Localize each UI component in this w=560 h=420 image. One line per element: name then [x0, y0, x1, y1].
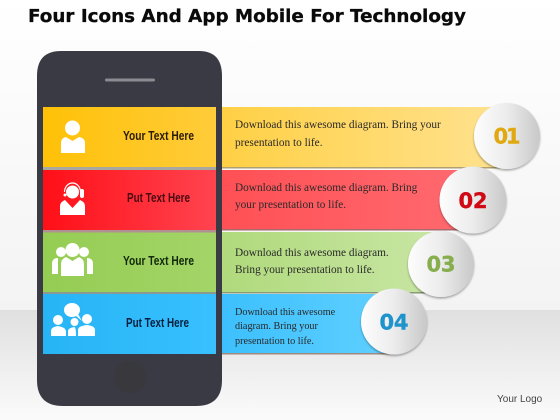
icon: group	[52, 243, 93, 276]
ribbon 2 text: Download this awesome diagram. Bring	[235, 182, 418, 194]
phone speaker	[105, 78, 155, 82]
ribbon 4 text: diagram. Bring your	[235, 321, 319, 332]
home button	[114, 361, 146, 393]
card 4 label: Put Text Here	[126, 316, 189, 330]
icon: group with speech bubble	[51, 303, 95, 336]
badge 04: 04	[380, 310, 408, 334]
ribbon 4: blue	[222, 294, 394, 354]
ribbon 1 text: Download this awesome diagram. Bring your	[235, 119, 441, 131]
card 3 label: Your Text Here	[123, 254, 194, 268]
floor band	[0, 310, 560, 420]
phone body	[37, 51, 222, 406]
card 3: green	[43, 232, 216, 294]
card 4: blue	[43, 294, 216, 354]
icon: headset agent	[60, 183, 85, 215]
ribbon 4 text: presentation to life.	[235, 336, 314, 347]
background	[0, 0, 560, 310]
card 1: yellow	[43, 107, 216, 170]
ribbon 3: green	[222, 232, 440, 294]
ribbon 2 text: your presentation to life.	[235, 199, 346, 211]
title: Four Icons And App Mobile For Technology	[28, 6, 466, 27]
badge 01: 01	[494, 124, 520, 148]
ribbon 1: yellow	[222, 107, 507, 168]
ribbon 1 text: presentation to life.	[235, 137, 323, 149]
card 2 label: Put Text Here	[127, 191, 190, 205]
badge 02	[440, 166, 506, 234]
card 1 label: Your Text Here	[123, 129, 194, 143]
badge 01	[474, 103, 540, 169]
badge 03: 03	[426, 252, 456, 276]
logo text: Your Logo	[497, 394, 543, 405]
ribbon 3 text: Bring your presentation to life.	[235, 264, 375, 276]
badge 03	[408, 231, 474, 297]
ribbon 3 text: Download this awesome diagram.	[235, 247, 389, 259]
icon: person	[61, 120, 85, 153]
badge 02: 02	[458, 189, 488, 213]
ribbon 4 text: Download this awesome	[235, 307, 336, 318]
ribbon 2: red	[222, 170, 472, 230]
card 2: red	[43, 170, 216, 232]
badge 04	[361, 288, 427, 354]
